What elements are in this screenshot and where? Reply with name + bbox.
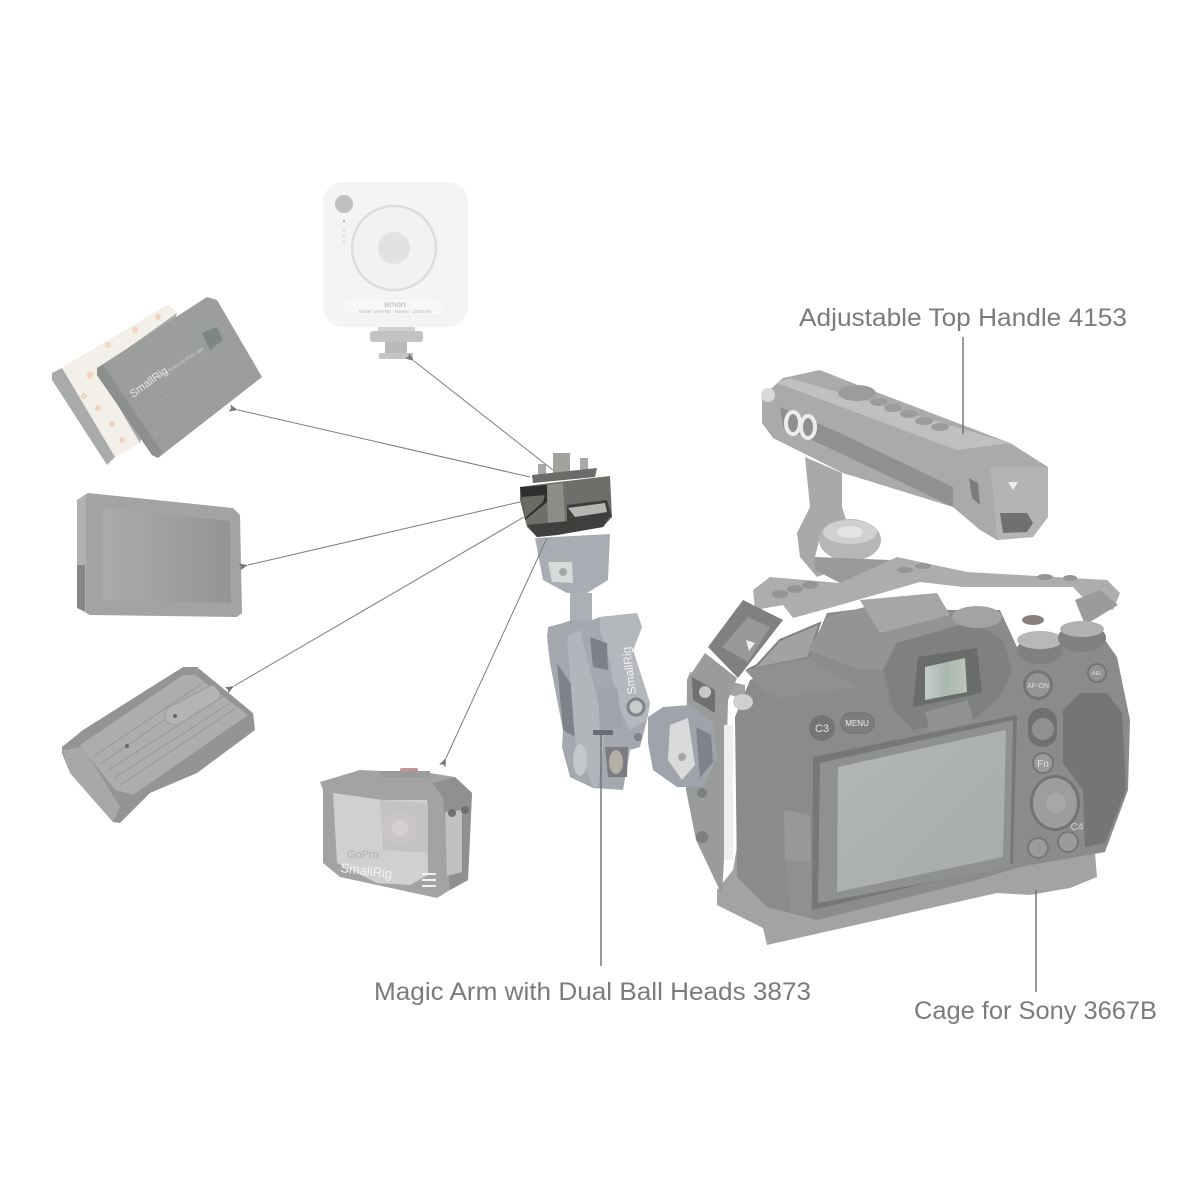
product: magic arm <box>535 534 717 790</box>
product: cold-shoe mount highlighted <box>520 453 612 537</box>
rear control dial <box>1030 775 1080 831</box>
label: Cage for Sony 3667B: Cage for Sony 3667B <box>914 997 1157 1025</box>
ball head block right <box>648 705 717 787</box>
hand grip <box>1063 693 1126 847</box>
leader lines to labels <box>601 337 1036 992</box>
lens mount ring behind strap <box>747 623 820 670</box>
AEL button <box>1087 663 1107 683</box>
ball head block top <box>535 534 610 593</box>
joystick <box>1028 708 1057 747</box>
MENU button <box>841 713 874 733</box>
product: action camera cage <box>320 768 472 898</box>
product: magic arm: SmallRig <box>619 646 639 695</box>
product: battery plate <box>62 667 255 823</box>
product: camera cage and camera body: C4 <box>1071 822 1084 833</box>
product: action camera cage: GoPro <box>347 849 379 861</box>
product: video light top: Model: VM-FRB · Battery: 1200mAh <box>359 309 432 314</box>
link window <box>590 637 608 670</box>
arrow: to battery plate <box>234 517 524 686</box>
product: LED panel lights <box>52 297 262 465</box>
AF-ON button <box>1023 670 1053 700</box>
pivot screw <box>628 699 644 715</box>
playback button <box>1028 838 1048 858</box>
product: on-camera monitor <box>77 493 242 617</box>
locking knob <box>819 519 881 561</box>
product: video light top <box>323 182 468 359</box>
cage left strap <box>708 600 783 678</box>
product: LED panel lights: Multi-functional RGB Light <box>158 346 205 379</box>
arrows from mount to accessories <box>234 361 553 758</box>
cage top plate <box>753 557 1120 618</box>
product: camera cage and camera body <box>686 557 1130 945</box>
hot shoe <box>860 593 950 633</box>
front link band <box>567 630 605 787</box>
camera body <box>735 608 1130 920</box>
product: camera cage and camera body: AF-ON <box>1027 683 1049 690</box>
label: Magic Arm with Dual Ball Heads 3873: Magic Arm with Dual Ball Heads 3873 <box>374 978 811 1006</box>
arrow: to action cage <box>446 538 547 758</box>
arrow: to monitor <box>248 501 524 565</box>
handle bar <box>762 370 1048 540</box>
arm silhouette <box>547 613 650 790</box>
product: adjustable top handle <box>761 370 1048 583</box>
product: video light top: simorr <box>384 300 406 309</box>
cage base and silhouette <box>687 672 1097 945</box>
top dials <box>952 606 1002 628</box>
label: Adjustable Top Handle 4153: Adjustable Top Handle 4153 <box>799 304 1127 332</box>
product: camera cage and camera body: MENU <box>845 719 869 728</box>
C3 button <box>809 715 835 741</box>
Fn button <box>1033 753 1053 773</box>
arrow: to panel light <box>238 410 530 477</box>
product: LED panel lights: SmallRig <box>128 365 170 400</box>
product: action camera cage: SmallRig <box>340 860 393 881</box>
pivot cylinder <box>598 687 623 730</box>
inner shadow plate <box>557 663 588 737</box>
eyepiece <box>883 622 1012 730</box>
arrow: to top light <box>414 361 553 470</box>
product: camera cage and camera body: C3 <box>815 723 829 735</box>
right link <box>600 613 650 730</box>
viewfinder hump <box>808 603 973 670</box>
delete button <box>1058 832 1078 852</box>
product: camera cage and camera body: Fn <box>1037 759 1049 770</box>
rear screen <box>837 730 1006 892</box>
rear screen bezel <box>812 715 1017 910</box>
handle stem <box>797 457 847 577</box>
upright right support <box>1075 590 1118 625</box>
screen hinge <box>784 810 811 863</box>
lower window and roller <box>605 747 628 777</box>
product: camera cage and camera body: AEL <box>1092 671 1102 677</box>
cage side rail <box>686 653 737 895</box>
